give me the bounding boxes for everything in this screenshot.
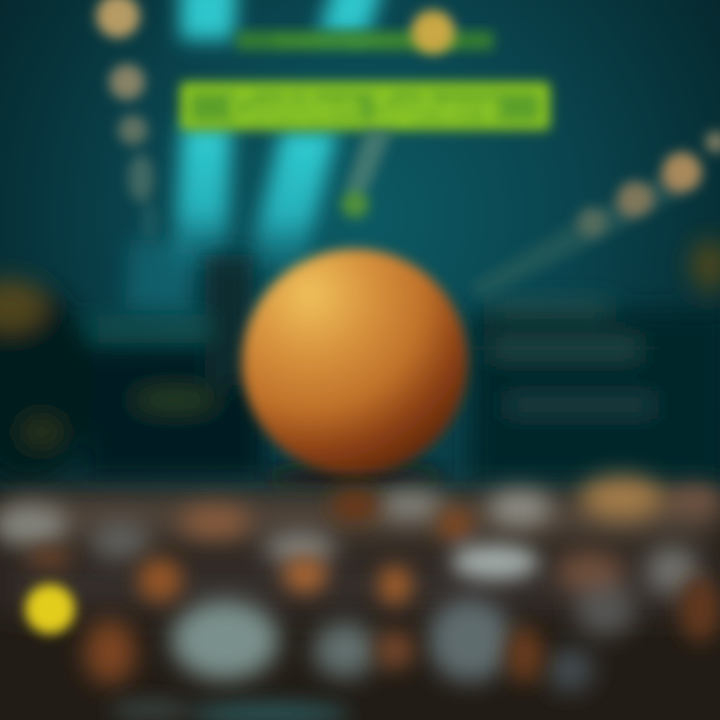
gold orb — [411, 10, 455, 54]
dark city silhouette right — [470, 239, 720, 485]
subtitle — [236, 31, 494, 51]
title — [180, 82, 550, 130]
foreground pebbles — [0, 476, 720, 720]
pendant string and green dot — [341, 132, 392, 218]
golden sphere — [242, 249, 468, 490]
dark city silhouette left — [0, 255, 265, 485]
yellow dot — [25, 584, 75, 634]
title: Golden Sphere — [230, 87, 500, 129]
right bead string — [470, 131, 720, 300]
subtitle: Golden Sphere Facts — [275, 31, 455, 51]
left bead string — [96, 0, 158, 242]
light beams — [125, 0, 385, 310]
